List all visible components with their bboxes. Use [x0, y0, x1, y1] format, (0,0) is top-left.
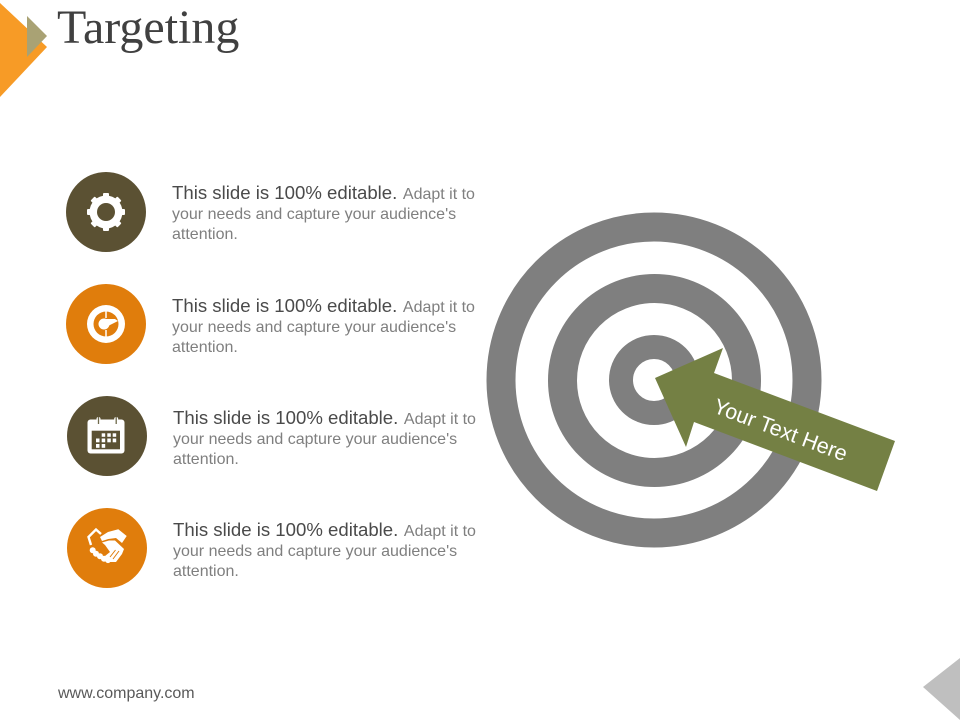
text block 4 — [173, 519, 476, 580]
icon: calendar — [67, 396, 147, 476]
text block 3: your needs and capture your audience's — [173, 431, 457, 448]
text block 2: attention. — [172, 339, 238, 356]
arrow with label — [655, 348, 895, 491]
text block 2 — [172, 295, 475, 356]
footer url: www.company.com — [58, 685, 195, 702]
title: Targeting — [57, 1, 239, 54]
text block 1: attention. — [172, 226, 238, 243]
icon: target dial — [66, 284, 146, 364]
corner decoration: orange and tan arrows — [0, 3, 47, 97]
arrow with label: Your Text Here — [710, 394, 851, 466]
text block 1: This slide is 100% editable. Adapt it to — [172, 182, 475, 203]
text block 4: attention. — [173, 563, 239, 580]
icon: handshake — [67, 508, 147, 588]
text block 3: attention. — [173, 451, 239, 468]
icon: gear — [66, 172, 146, 252]
text block 4: This slide is 100% editable. Adapt it to — [173, 519, 476, 540]
text block 4: your needs and capture your audience's — [173, 543, 457, 560]
text block 2: This slide is 100% editable. Adapt it to — [172, 295, 475, 316]
text block 1 — [172, 182, 475, 243]
text block 3: This slide is 100% editable. Adapt it to — [173, 407, 476, 428]
text block 1: your needs and capture your audience's — [172, 206, 456, 223]
text block 2: your needs and capture your audience's — [172, 319, 456, 336]
corner decoration: grey triangle — [923, 658, 960, 720]
text block 3 — [173, 407, 476, 468]
target rings — [501, 227, 807, 533]
